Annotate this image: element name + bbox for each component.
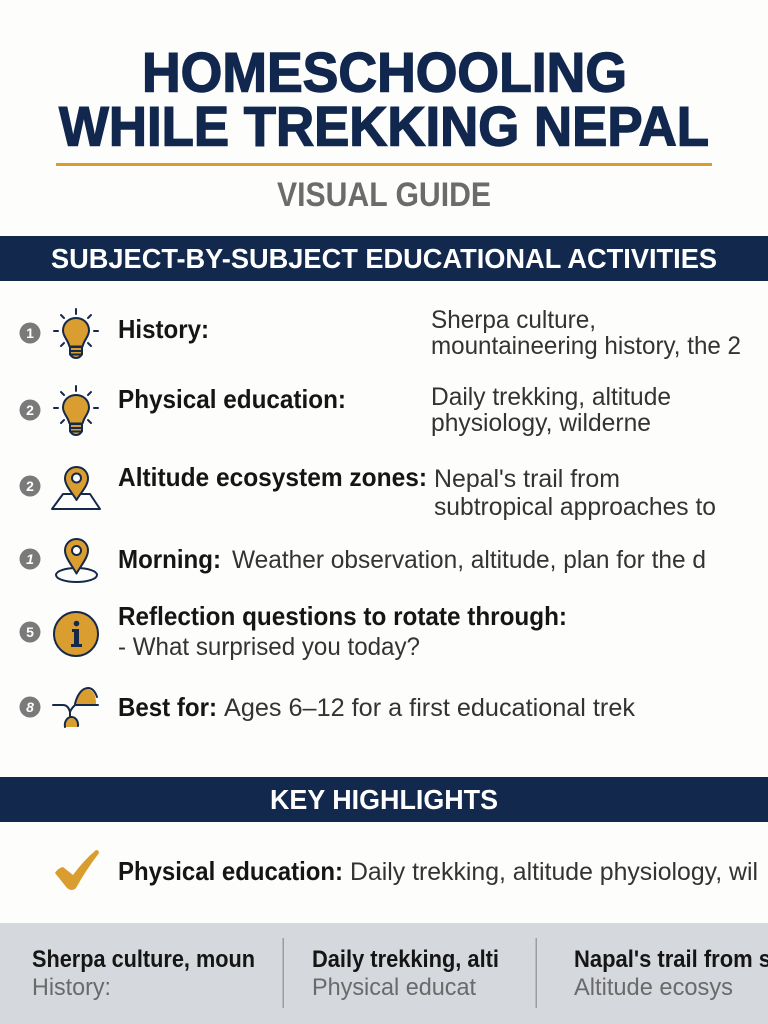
description: best for: Ages 6–12 for a first educational trek — [224, 694, 635, 722]
icon: trail and hill — [53, 688, 98, 727]
section banner: key highlights: KEY HIGHLIGHTS — [270, 784, 498, 815]
number badge 5: 5 — [26, 624, 34, 640]
label: reflection questions: Reflection questions to rotate through: — [118, 601, 567, 631]
row: reflection questions — [20, 601, 567, 661]
number badge 1 — [20, 322, 40, 344]
subtitle: VISUAL GUIDE — [277, 176, 491, 214]
title: HOMESCHOOLING — [142, 40, 627, 104]
description: history — [431, 306, 741, 360]
description: physical education — [431, 383, 671, 437]
description: physical education: physiology, wilderne — [431, 409, 651, 437]
description: morning: Weather observation, altitude, plan for the d — [232, 546, 706, 574]
description: history: Sherpa culture, — [431, 306, 596, 334]
footer stat: history: Sherpa culture, moun — [32, 946, 255, 973]
icon: light bulb — [54, 386, 98, 435]
title — [59, 40, 709, 158]
section banner: key highlights — [0, 777, 768, 822]
highlight text: Daily trekking, altitude physiology, wil — [350, 858, 758, 886]
row: morning — [20, 539, 706, 582]
label: altitude ecosystem zones: Altitude ecosystem zones: — [118, 462, 427, 492]
icon: map pin on map — [52, 467, 100, 509]
number badge 1: 1 — [26, 325, 34, 341]
row: altitude ecosystem zones — [20, 462, 716, 521]
number badge 1: 1 — [26, 551, 34, 567]
icon: check mark — [55, 850, 99, 890]
number badge 2 — [20, 400, 40, 420]
footer stat: altitude ecosystem: Altitude ecosys — [574, 974, 733, 1001]
footer stat: history — [32, 946, 255, 1001]
footer stat: physical education — [312, 946, 499, 1001]
row: physical education — [20, 383, 671, 437]
highlight label: Physical education: — [118, 856, 343, 886]
description: reflection question: - What surprised you today? — [118, 633, 420, 661]
number badge 5 — [20, 622, 40, 642]
footer stat: history: History: — [32, 974, 111, 1001]
row: best for — [20, 688, 635, 727]
row: history — [20, 306, 741, 360]
number badge 2: 2 — [26, 402, 34, 418]
number badge 1 — [20, 548, 40, 570]
description: physical education: Daily trekking, altitude — [431, 383, 671, 411]
label: history: History: — [118, 314, 209, 344]
section banner: subject-by-subject activities: SUBJECT-BY-SUBJECT EDUCATIONAL ACTIVITIES — [51, 243, 717, 274]
label: best for: Best for: — [118, 692, 217, 722]
description: altitude ecosystem zones: Nepal's trail from — [434, 465, 620, 493]
icon: information — [54, 612, 98, 656]
label: morning: Morning: — [118, 544, 221, 574]
footer stat: physical education: Physical educat — [312, 974, 476, 1001]
number badge 2: 2 — [26, 478, 34, 494]
footer panel — [0, 923, 768, 1024]
footer stat: physical education: Daily trekking, alti — [312, 946, 499, 973]
icon: map pin on ring — [56, 539, 97, 582]
gold title rule — [56, 163, 712, 166]
footer stat: altitude ecosystem — [574, 946, 768, 1001]
label: physical education: Physical education: — [118, 384, 346, 414]
description: altitude ecosystem zones: subtropical approaches to — [434, 493, 716, 521]
title: WHILE TREKKING NEPAL — [59, 94, 709, 158]
number badge 8 — [20, 696, 40, 718]
highlight row — [55, 850, 758, 890]
description: altitude ecosystem zones — [434, 465, 716, 521]
description: history: mountaineering history, the 2 — [431, 332, 741, 360]
icon: light bulb — [54, 309, 98, 358]
number badge 2 — [20, 476, 40, 496]
number badge 8: 8 — [26, 699, 34, 715]
section banner: subject-by-subject activities — [0, 236, 768, 281]
